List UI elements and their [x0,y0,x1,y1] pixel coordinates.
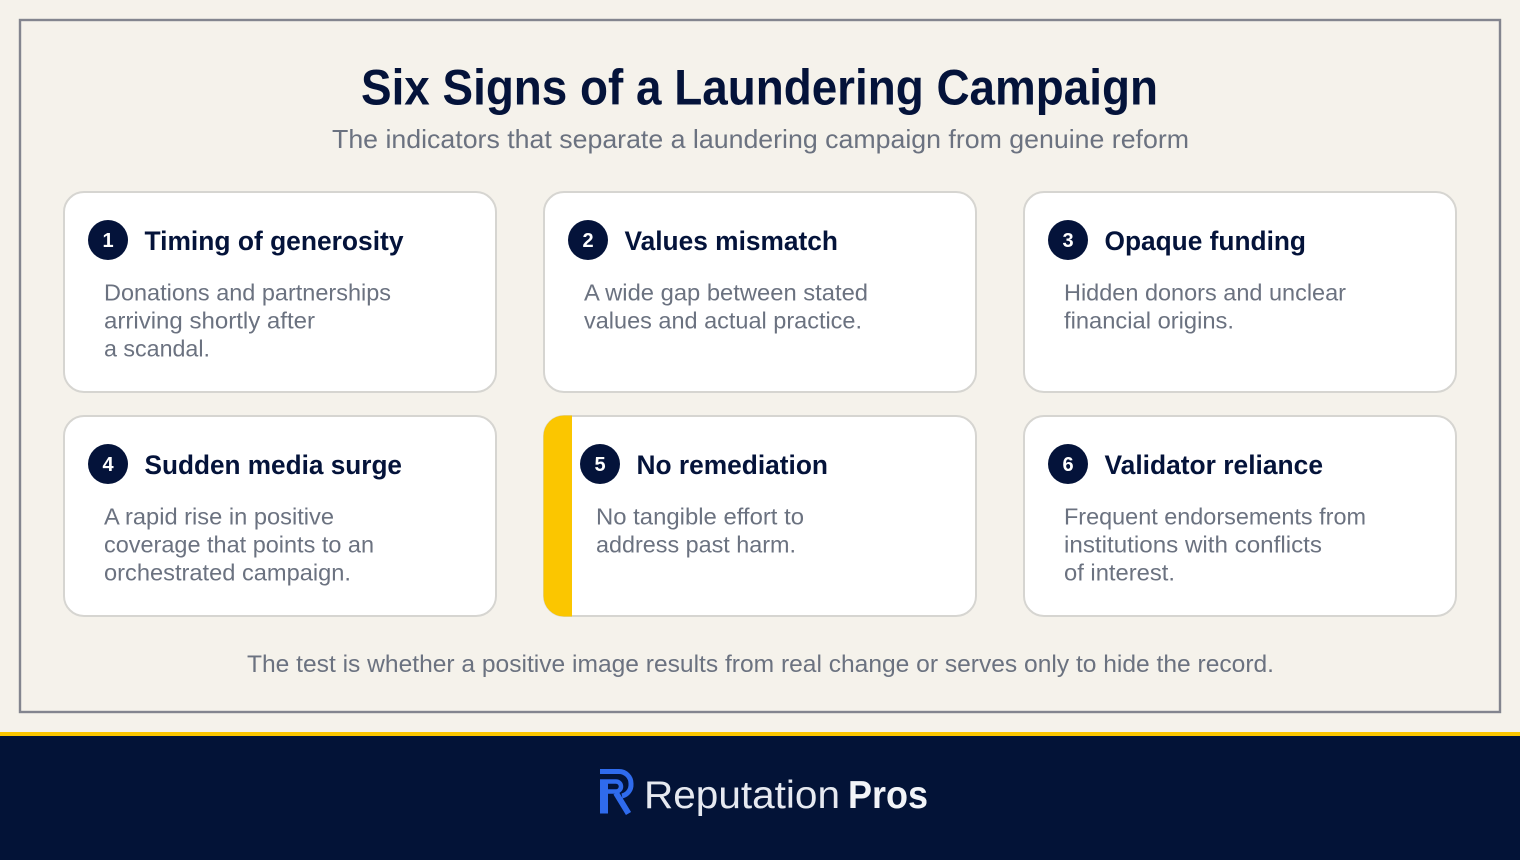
description 6 [1064,504,1366,586]
title: Six Signs of a Laundering Campaign [361,60,1158,116]
description 2: values and actual practice. [584,308,862,334]
panel: card 6 validator reliance [1024,416,1456,616]
panel: card 2 values mismatch [544,192,976,392]
description 2 [584,280,868,334]
panel: card 4 sudden media surge [64,416,496,616]
logo wordmark: Reputation [644,774,840,817]
panel: card 3 opaque funding [1024,192,1456,392]
accent bar [544,416,572,616]
heading 2: Values mismatch [624,226,838,256]
logo: Pros [848,774,928,817]
badge 6: 6 [1062,454,1074,476]
description 4: orchestrated campaign. [104,560,351,586]
closing note: The test is whether a positive image results from real change or serves only to hide the record. [247,651,1274,678]
badge 6 [1048,444,1088,484]
description 4: A rapid rise in positive [104,504,334,530]
description 6: of interest. [1064,560,1175,586]
icon: R mark [600,772,631,814]
badge 5: 5 [594,454,606,476]
description 2: A wide gap between stated [584,280,868,306]
subtitle: The indicators that separate a laundering campaign from genuine reform [332,124,1189,154]
badge 4: 4 [102,454,114,476]
description 1: Donations and partnerships [104,280,391,306]
badge 1: 1 [102,230,114,252]
heading 1: Timing of generosity [144,226,404,256]
badge 5 [580,444,620,484]
logo [600,772,928,817]
heading 4: Sudden media surge [144,450,402,480]
heading 3: Opaque funding [1104,226,1306,256]
badge 2 [568,220,608,260]
description 5: address past harm. [596,532,796,558]
heading 5: No remediation [636,450,828,480]
footer band [0,732,1520,860]
description 5: No tangible effort to [596,504,804,530]
badge 3 [1048,220,1088,260]
description 1: arriving shortly after [104,308,315,334]
outer frame [20,20,1500,712]
description 3 [1064,280,1346,334]
description 4 [104,504,374,586]
badge 4 [88,444,128,484]
panel: card 1 timing of generosity [64,192,496,392]
description 3: Hidden donors and unclear [1064,280,1346,306]
panel: card 5 no remediation [544,416,976,616]
description 6: Frequent endorsements from [1064,504,1366,530]
description 6: institutions with conflicts [1064,532,1322,558]
description 1 [104,280,391,362]
description 5 [596,504,804,558]
badge 3: 3 [1062,230,1074,252]
description 3: financial origins. [1064,308,1234,334]
description 1: a scandal. [104,336,210,362]
description 4: coverage that points to an [104,532,374,558]
badge 2: 2 [582,230,594,252]
badge 1 [88,220,128,260]
heading 6: Validator reliance [1104,450,1323,480]
